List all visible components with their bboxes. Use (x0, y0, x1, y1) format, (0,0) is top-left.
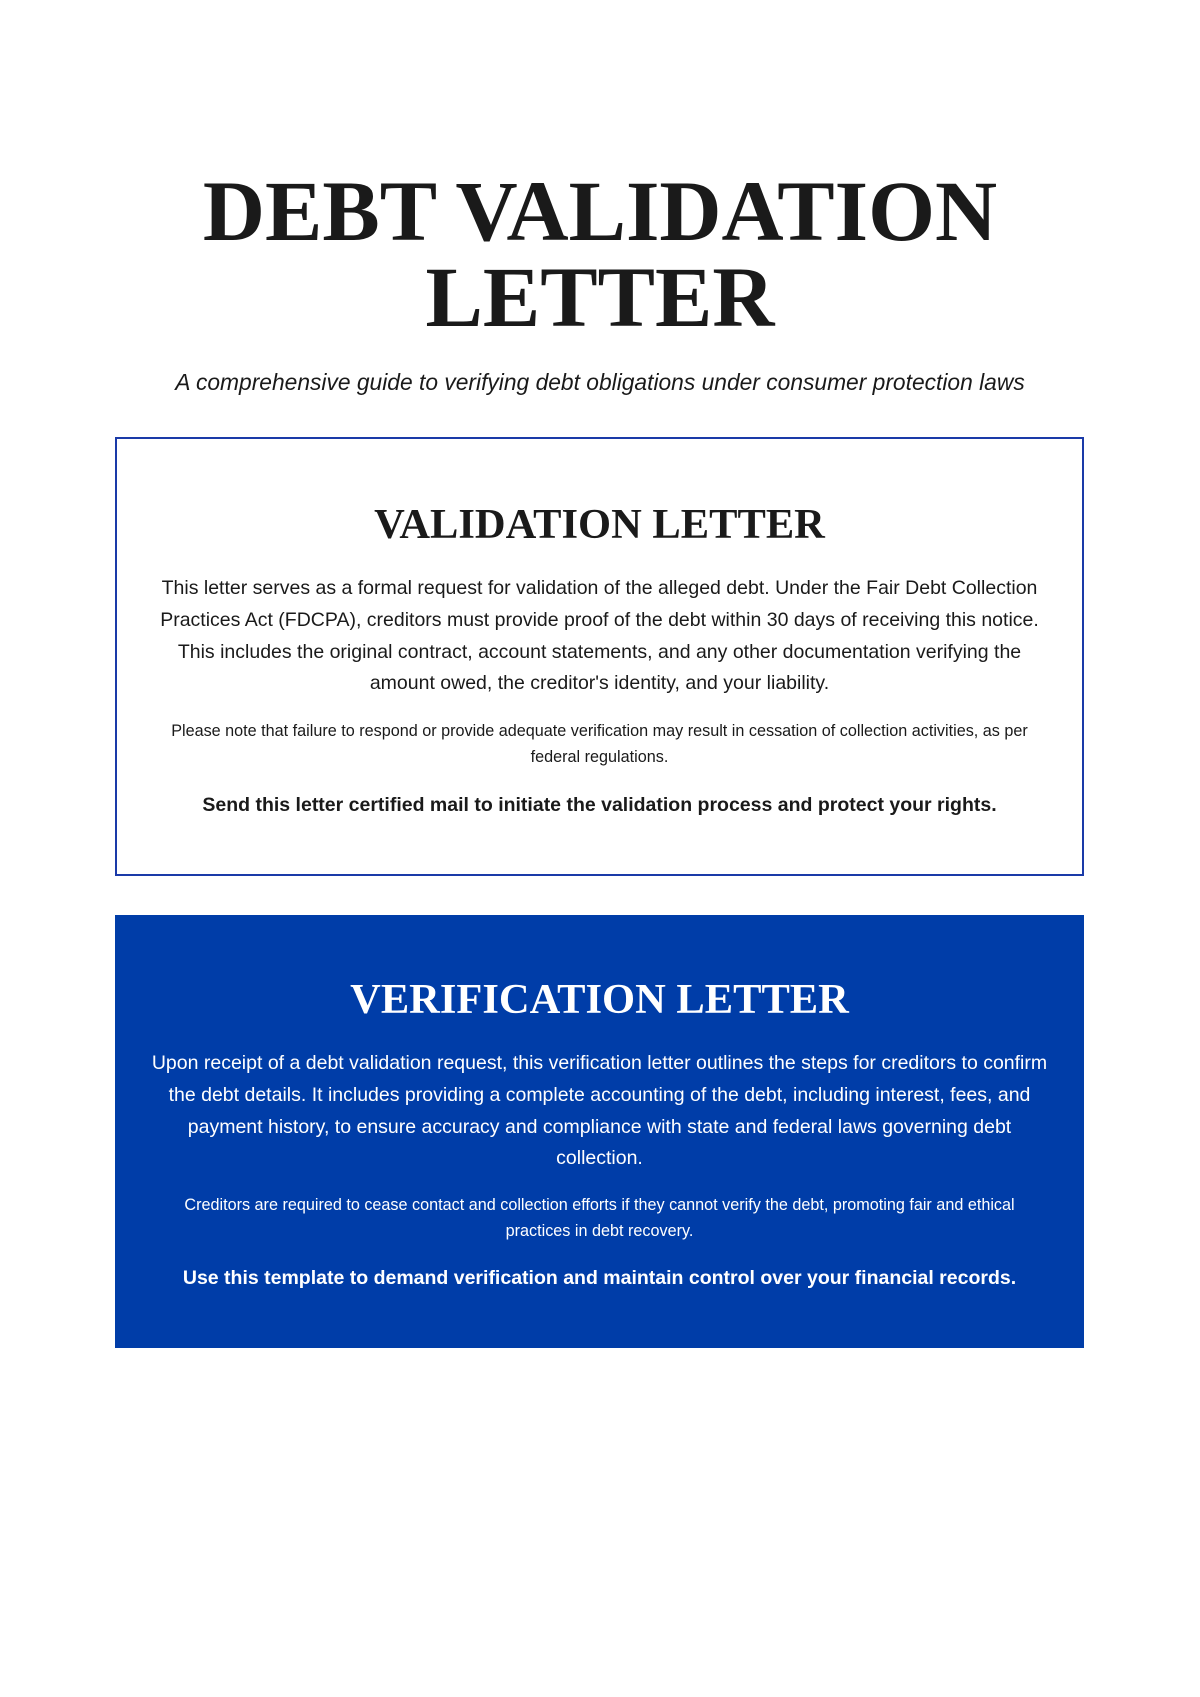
panel: validation letter (115, 437, 1084, 876)
panel: verification letter (115, 915, 1084, 1348)
title: DEBT VALIDATION (203, 163, 997, 259)
text block: validation body: This letter serves as a formal request for validation of the alleged debt. Under the Fair Debt Collection Practices Act (FDCPA), creditors must provide proof of the debt within 30 days of receiving this notice. This includes the original contract, account statements, and any other documentation verifying the amount owed, the creditor's identity, and your liability. (160, 577, 1039, 694)
heading: validation letter: VALIDATION LETTER (374, 501, 825, 548)
title (203, 163, 997, 345)
text block: validation note: Please note that failure to respond or provide adequate verification may result in cessation of collection activities, as per federal regulations. (171, 722, 1028, 766)
text block: verification call to action: Use this template to demand verification and maintain control over your financial records. (183, 1267, 1016, 1289)
text block: verification body: Upon receipt of a debt validation request, this verification letter outlines the steps for creditors to confirm the debt details. It includes providing a complete accounting of the debt, including interest, fees, and payment history, to ensure accuracy and compliance with state and federal laws governing debt collection. (152, 1052, 1047, 1169)
text block: verification note: Creditors are required to cease contact and collection efforts if they cannot verify the debt, promoting fair and ethical practices in debt recovery. (184, 1196, 1015, 1240)
text block: validation call to action: Send this letter certified mail to initiate the validation process and protect your rights. (202, 794, 997, 816)
heading: verification letter: VERIFICATION LETTER (350, 976, 849, 1023)
title: LETTER (426, 249, 774, 345)
subtitle: A comprehensive guide to verifying debt obligations under consumer protection laws (175, 369, 1025, 395)
